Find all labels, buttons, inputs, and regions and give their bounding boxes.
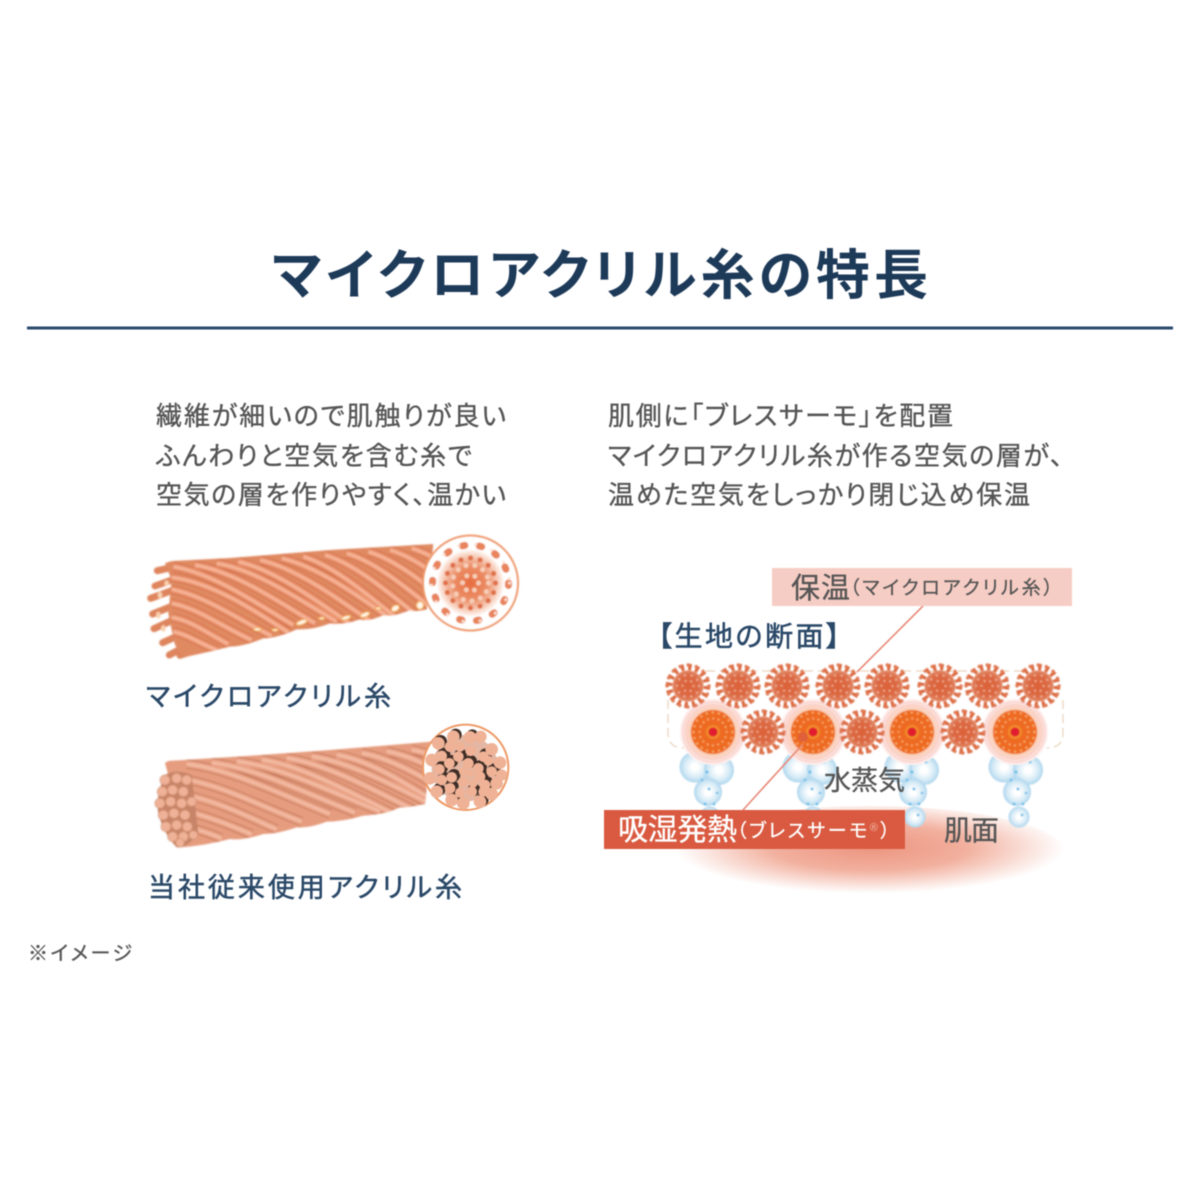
illustration: micro acrylic yarn [146,542,434,660]
text block: left description: 繊維が細いので肌触りが良い [156,401,506,431]
leader lines [743,606,923,810]
label: warmth retention: （マイクロアクリル糸） [850,577,1053,599]
bundled yarn end [157,772,198,847]
illustration: conventional acrylic yarn [154,740,431,849]
label: water vapour: 水蒸気 [824,766,905,796]
label: moisture-absorbing heat: ® [870,822,878,834]
label: micro acrylic yarn: マイクロアクリル糸 [146,682,391,712]
label: warmth retention: 保温 [791,572,850,605]
icon: conventional acrylic cross section [423,725,508,810]
text block: left description [156,401,506,510]
heading: fabric cross section: 【生地の断面】 [658,621,840,652]
skin glow [675,806,1065,898]
note: image only: ※イメージ [28,943,132,965]
text block: right description: 温めた空気をしっかり閉じ込め保温 [608,480,1030,510]
fabric outline [668,671,1063,748]
title: マイクロアクリル糸の特長 [272,246,928,306]
text block: right description [608,401,1063,510]
label: conventional acrylic yarn: 当社従来使用アクリル糸 [148,873,462,903]
text block: left description: ふんわりと空気を含む糸で [156,441,472,471]
diagram: fabric cross section [604,568,1072,898]
water vapour bubbles [680,752,1043,828]
text block: left description: 空気の層を作りやすく、温かい [156,480,506,510]
label: moisture-absorbing heat: 吸湿発熱 [618,814,737,847]
glints on lower edge [253,601,424,631]
label: moisture-absorbing heat: （ブレスサーモ [737,821,867,842]
label: warmth retention [772,568,1072,606]
icon: micro acrylic cross section [423,536,518,630]
text block: right description: 肌側に「ブレスサーモ」を配置 [608,401,953,431]
frayed yarn ends [151,565,197,655]
label: moisture-absorbing heat [604,810,905,849]
label: moisture-absorbing heat: ） [880,820,890,842]
label: skin surface: 肌面 [944,815,999,846]
text block: right description: マイクロアクリル糸が作る空気の層が、 [608,441,1063,471]
fibres [667,665,1059,765]
